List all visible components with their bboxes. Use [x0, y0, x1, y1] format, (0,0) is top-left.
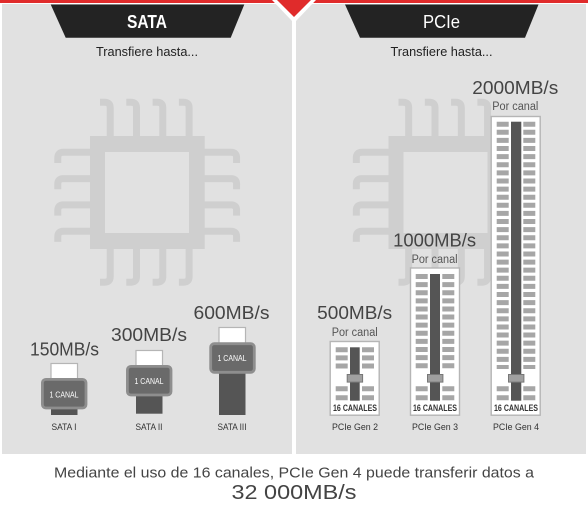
chart: SATA I: SATA I — [52, 422, 76, 432]
chart: PCIe Gen 4: Por canal — [492, 101, 538, 113]
chart: PCIe Gen 4: 16 CANALES — [494, 403, 538, 413]
chart: SATA III: 1 CANAL — [218, 353, 247, 363]
chart: PCIe Gen 2: PCIe Gen 2 — [332, 422, 378, 432]
chart: PCIe Gen 2: 16 CANALES — [333, 403, 377, 413]
chart: PCIe Gen 3: 1000MB/s — [393, 230, 476, 250]
icon: red centre triangle — [277, 0, 311, 17]
chart: SATA III: SATA III — [218, 422, 246, 432]
chart: PCIe Gen 3: Por canal — [412, 254, 458, 266]
chart: PCIe Gen 4: 2000MB/s — [472, 78, 558, 98]
icon: chip watermark PCIe — [356, 102, 535, 282]
centre notch — [272, 0, 316, 24]
chart: SATA III: 600MB/s — [194, 303, 270, 323]
heading: PCIe — [345, 4, 538, 38]
chart: SATA II: 300MB/s — [111, 325, 187, 345]
chart: PCIe Gen 2 — [317, 303, 392, 432]
chart: SATA II — [111, 325, 187, 432]
chart: SATA II: SATA II — [136, 422, 162, 432]
chart: PCIe Gen 2: Por canal — [332, 327, 378, 339]
caption: Mediante el uso de 16 canales, PCIe Gen 4 puede transferir datos a — [54, 464, 535, 482]
chart: PCIe Gen 4 — [472, 78, 558, 432]
chart: SATA II: 1 CANAL — [134, 376, 164, 386]
heading: PCIe: PCIe — [423, 12, 460, 32]
heading: SATA — [51, 4, 244, 38]
chart: PCIe Gen 3 — [393, 230, 476, 432]
chart: SATA III — [194, 303, 270, 432]
chart: PCIe Gen 2: 500MB/s — [317, 303, 392, 323]
chart: PCIe Gen 3: PCIe Gen 3 — [412, 422, 458, 432]
heading: SATA: SATA — [127, 12, 167, 32]
chart: SATA I: 150MB/s — [30, 340, 99, 360]
icon: chip watermark SATA — [58, 102, 237, 282]
chart: SATA I: 1 CANAL — [50, 390, 79, 400]
top red bar — [0, 0, 588, 3]
panel: PCIe background — [296, 4, 586, 454]
text: PCIe intro: Transfiere hasta... — [390, 45, 492, 59]
chart: PCIe Gen 4: PCIe Gen 4 — [493, 422, 539, 432]
chart: PCIe Gen 3: 16 CANALES — [413, 403, 457, 413]
panel: SATA background — [2, 4, 292, 454]
callout: total speed: 32 000MB/s — [232, 482, 356, 504]
text: SATA intro: Transfiere hasta... — [96, 45, 198, 59]
chart: SATA I — [30, 340, 99, 432]
